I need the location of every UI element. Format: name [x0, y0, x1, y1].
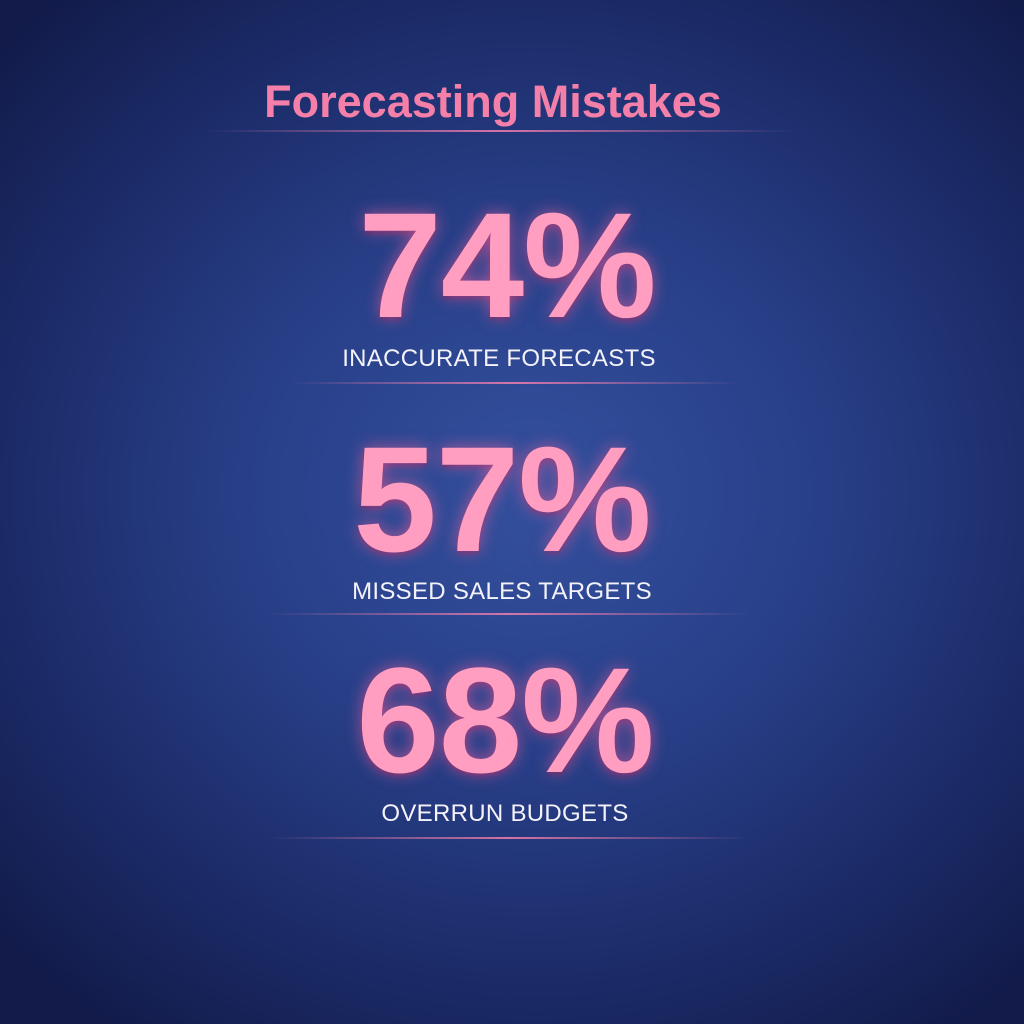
label: INACCURATE FORECASTS	[342, 345, 656, 372]
number 74: 74%	[358, 181, 656, 349]
stat: 74%	[342, 181, 664, 372]
stat: 57%	[350, 415, 658, 605]
stat: 68%	[350, 636, 662, 827]
number 68: 68%	[356, 636, 654, 804]
title: Forecasting Mistakes	[264, 76, 722, 127]
label: MISSED SALES TARGETS	[352, 578, 652, 605]
number 57: 57%	[353, 415, 651, 583]
label: OVERRUN BUDGETS	[381, 800, 629, 827]
